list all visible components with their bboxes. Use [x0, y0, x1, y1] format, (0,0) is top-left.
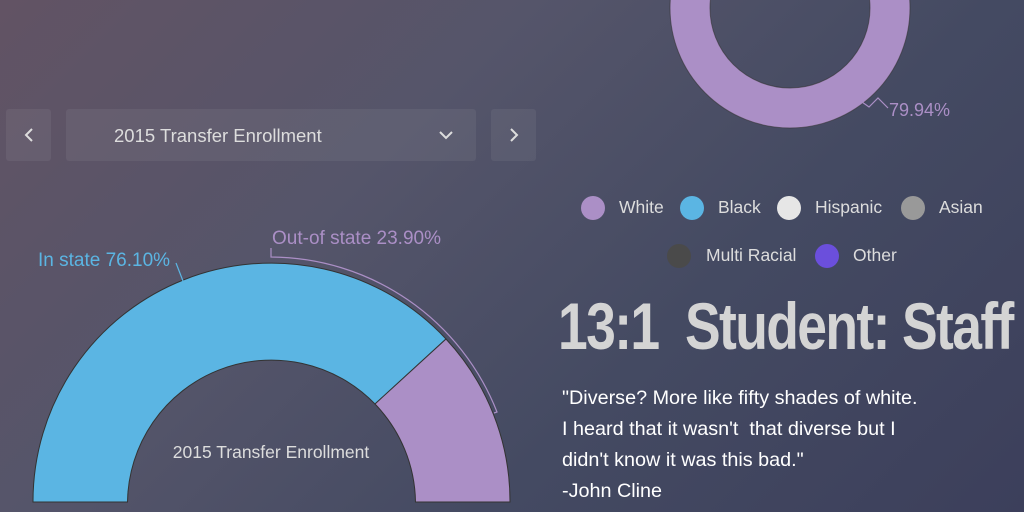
quote: [562, 387, 918, 502]
legend: White: [619, 197, 664, 217]
quote: didn't know it was this bad.": [562, 449, 804, 471]
nav: dropdown selector: [66, 109, 476, 161]
quote: -John Cline: [562, 480, 662, 502]
legend: Asian: [939, 197, 983, 217]
legend: Multi Racial: [706, 245, 796, 265]
chart: transfer enrollment gauge: Out-of state 23.90%: [272, 228, 441, 249]
nav: next button: [491, 109, 536, 161]
chart: transfer enrollment gauge: 2015 Transfer Enrollment: [173, 442, 369, 462]
heading: student staff ratio: 13:1 Student: Staff: [558, 289, 1013, 363]
nav: dropdown selector: 2015 Transfer Enrollment: [114, 125, 322, 146]
legend: Other: [853, 245, 897, 265]
legend: [581, 196, 983, 268]
legend: Hispanic: [815, 197, 882, 217]
legend: Black: [718, 197, 761, 217]
quote: "Diverse? More like fifty shades of white.: [562, 387, 918, 409]
nav: previous button: [6, 109, 51, 161]
chart: ethnicity donut: 79.94%: [889, 100, 950, 120]
chart: transfer enrollment gauge: In state 76.10%: [38, 250, 170, 271]
quote: I heard that it wasn't that diverse but I: [562, 418, 896, 440]
